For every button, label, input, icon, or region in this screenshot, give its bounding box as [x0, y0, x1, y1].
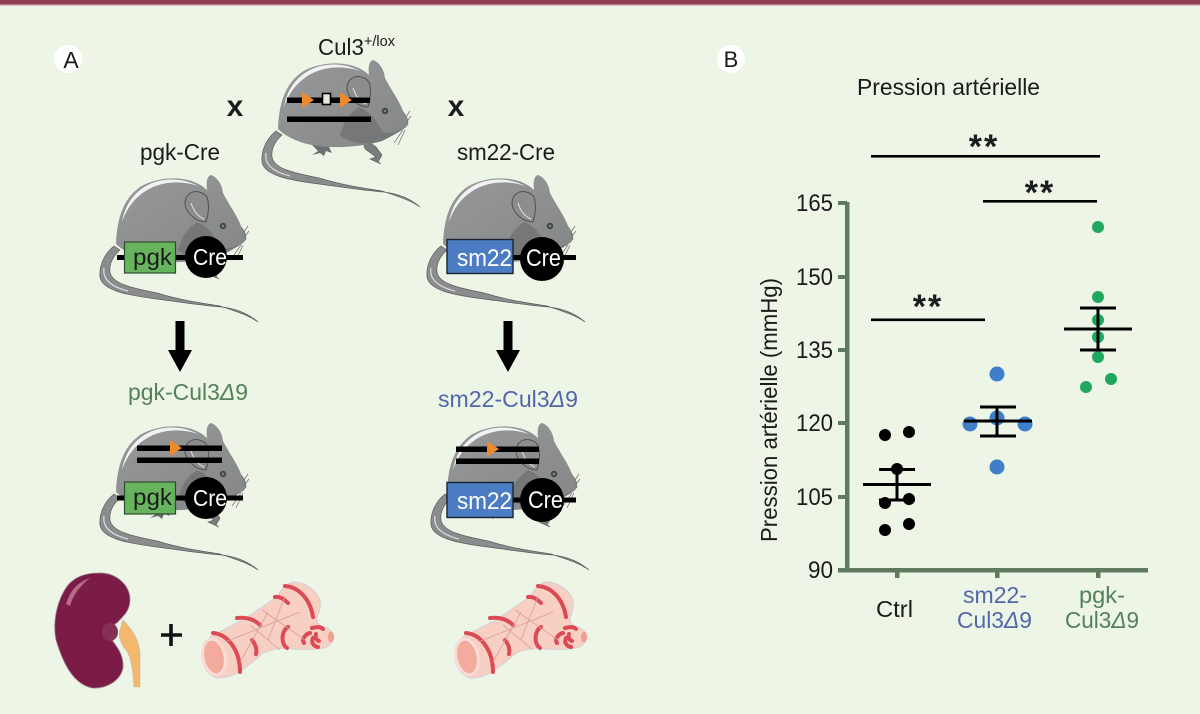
- significance bar: sm22 vs pgk: [983, 174, 1097, 212]
- data points: sm22-Cul3Δ9: [962, 366, 1032, 474]
- panel letter B: [717, 45, 745, 73]
- mouse: pgk-Cre: pgk: [133, 244, 173, 270]
- label: Cul3 +/lox: +/lox: [364, 33, 395, 50]
- mouse: sm22-Cul3Δ9: sm22: [457, 488, 512, 515]
- top bar: [0, 0, 1200, 6]
- cross mark left: x: [227, 90, 244, 123]
- x label: sm22-Cul3Δ9: Cul3Δ9: [957, 607, 1032, 633]
- icon: blood vessel right: [452, 582, 587, 678]
- mouse: pgk-Cul3Δ9: pgk: [133, 484, 173, 510]
- panel B: blood pressure chart: [717, 45, 1148, 633]
- label: sm22-Cul3Δ9: sm22-Cul3Δ9: [438, 386, 578, 412]
- y axis tick labels: [796, 190, 833, 584]
- label: sm22-Cre: sm22-Cre: [457, 139, 555, 165]
- mouse: sm22-Cul3Δ9: Cre: [528, 487, 563, 514]
- mean and error bars: sm22-Cul3Δ9: [964, 407, 1032, 436]
- y axis tick labels: 120: [796, 410, 833, 437]
- label: pgk-Cre: pgk-Cre: [140, 139, 220, 165]
- y axis tick labels: 165: [796, 190, 833, 217]
- mouse: Cul3 +/lox: [262, 60, 420, 207]
- x label: pgk-Cul3Δ9: pgk-: [1079, 582, 1125, 608]
- x label: sm22-Cul3Δ9: [957, 582, 1032, 633]
- chart title: Pression artérielle: [857, 74, 1040, 100]
- x label: sm22-Cul3Δ9: sm22-: [963, 582, 1027, 608]
- cross mark right: x: [448, 90, 465, 123]
- axes: [838, 201, 1148, 578]
- mouse: sm22-Cul3Δ9: [431, 423, 589, 570]
- mouse: pgk-Cul3Δ9: Cre: [193, 485, 227, 511]
- icon: plus: [161, 624, 182, 646]
- label: pgk-Cul3Δ9: pgk-Cul3Δ9: [128, 379, 248, 405]
- panel letter A: [54, 45, 82, 73]
- mean and error bars: Ctrl: [863, 470, 931, 500]
- icon: kidney: [55, 573, 140, 688]
- arrow: pgk-Cre down: [168, 321, 192, 372]
- y axis tick labels: 135: [796, 337, 833, 364]
- mouse: pgk-Cre: Cre: [193, 244, 227, 270]
- mouse: sm22-Cre: sm22: [457, 245, 512, 272]
- y axis label: Pression artérielle (mmHg): [756, 278, 782, 542]
- x label: pgk-Cul3Δ9: [1065, 582, 1139, 633]
- y axis tick labels: 150: [796, 264, 833, 291]
- mouse: sm22-Cre: [427, 175, 585, 322]
- significance bar: Ctrl vs sm22: **: [913, 288, 943, 326]
- mouse: pgk-Cre: [100, 175, 258, 322]
- mouse: sm22-Cre: Cre: [526, 245, 561, 272]
- panel A: breeding scheme: [54, 33, 589, 688]
- arrow: sm22-Cre down: [496, 321, 520, 372]
- significance bar: Ctrl vs pgk: **: [969, 128, 999, 166]
- mean and error bars: pgk-Cul3Δ9: [1064, 308, 1132, 350]
- label: Cul3 +/lox: Cul3: [318, 34, 365, 60]
- data points: Ctrl: [879, 426, 915, 536]
- data points: pgk-Cul3Δ9: [1080, 221, 1117, 393]
- y axis tick labels: 105: [796, 484, 833, 511]
- panel letter A: A: [63, 47, 79, 73]
- panel letter B: B: [724, 47, 738, 72]
- y axis tick labels: 90: [808, 557, 833, 584]
- icon: blood vessel left: [199, 582, 334, 678]
- mouse: pgk-Cul3Δ9: [100, 423, 258, 570]
- significance bar: sm22 vs pgk: **: [1025, 174, 1055, 212]
- x label: Ctrl: Ctrl: [876, 596, 913, 622]
- x label: pgk-Cul3Δ9: Cul3Δ9: [1065, 607, 1139, 633]
- significance bar: Ctrl vs sm22: [871, 288, 985, 326]
